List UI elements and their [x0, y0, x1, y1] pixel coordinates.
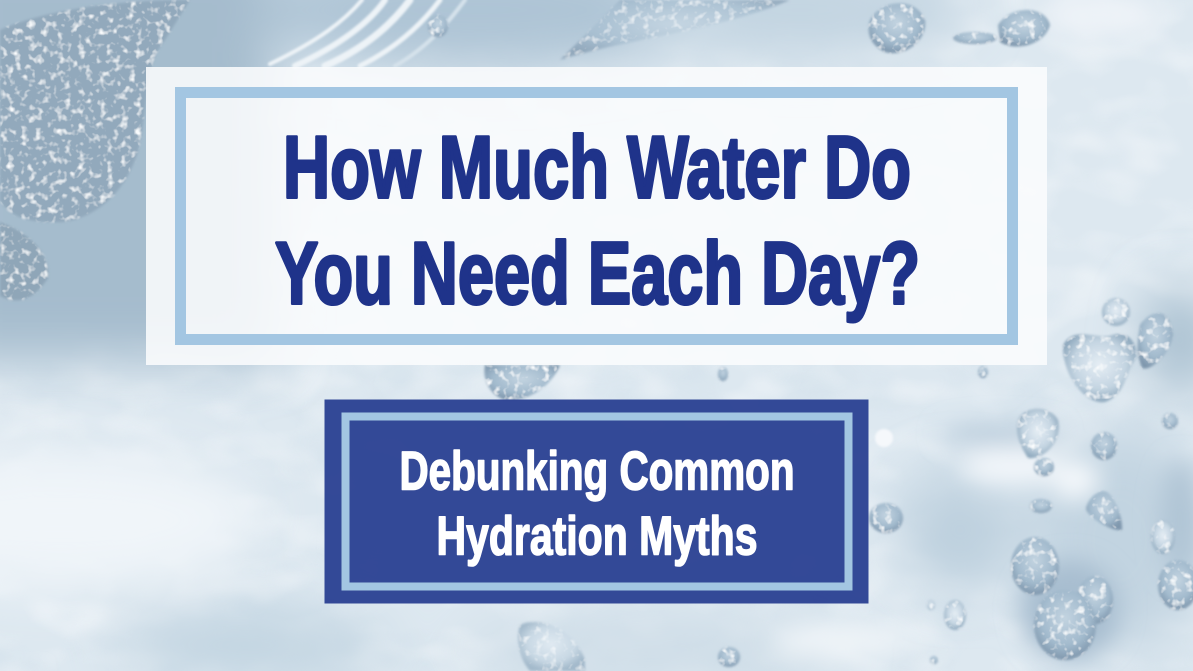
heading: title text — [275, 118, 920, 322]
splash texture upper left — [0, 0, 190, 300]
water droplets — [428, 0, 1193, 671]
light blue title frame — [180, 92, 1012, 340]
heading: title text: You Need Each Day? — [275, 224, 920, 322]
text: subtitle: Debunking Common — [400, 440, 794, 502]
dark blue subtitle panel — [324, 400, 868, 604]
text: subtitle: Hydration Myths — [436, 504, 758, 566]
ripples top centre — [270, 0, 465, 66]
text: subtitle — [400, 440, 794, 566]
panel: subtitle — [324, 400, 868, 604]
light blue subtitle frame — [346, 416, 848, 586]
panel: title — [146, 67, 1047, 365]
translucent white title panel — [146, 67, 1047, 365]
heading: title text: How Much Water Do — [283, 118, 911, 216]
